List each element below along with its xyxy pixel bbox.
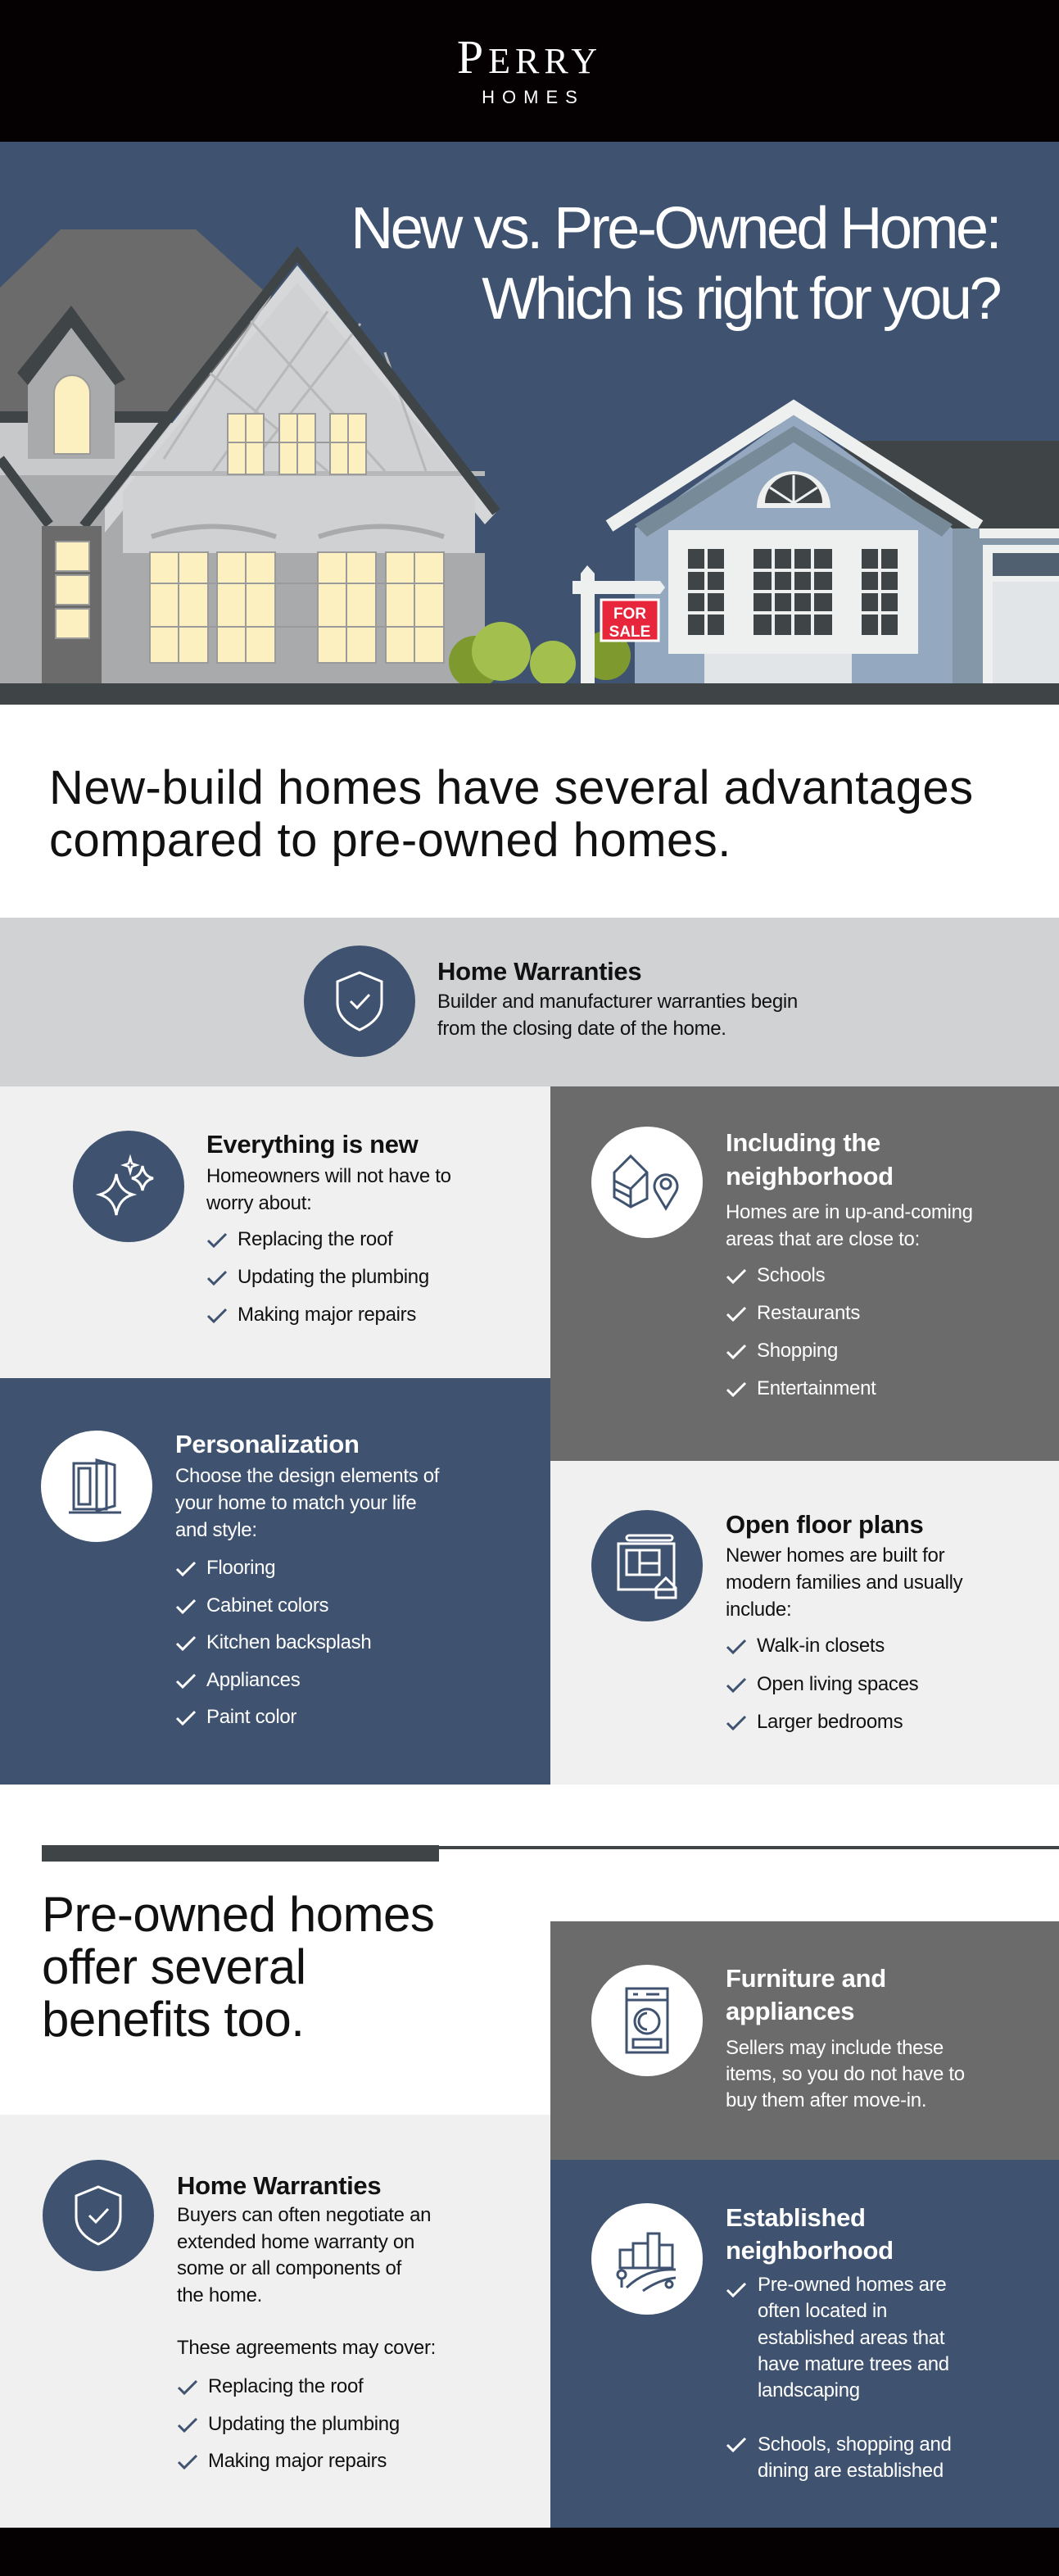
heading: Personalization [175,1430,360,1458]
text [726,2037,965,2111]
icon: washer [591,1965,703,2076]
bullet 1 [726,2274,949,2401]
logo: Perry Homes: PERRY [457,30,602,84]
list [207,1228,429,1326]
heading: Everything is new [206,1130,418,1159]
list: Replacing the roof [208,2375,363,2397]
icon: shield [304,946,415,1057]
list: Shopping [757,1340,838,1362]
bullet 2: dining are established [758,2460,944,2482]
heading: Open floor plans [726,1510,924,1539]
bullet 1: often located in [758,2300,887,2322]
heading [726,1128,894,1190]
text: include: [726,1599,791,1621]
panel: home warranties (pre-owned) [43,2160,436,2472]
text [206,1165,451,1214]
divider rule [42,1845,439,1862]
headline: pre-owned benefits: Pre-owned homes [42,1887,434,1942]
panel: furniture and appliances [591,1964,965,2111]
panel: everything is new [73,1130,451,1326]
panel: established neighborhood [591,2203,952,2482]
list [176,1557,371,1728]
headline: pre-owned benefits [42,1887,434,2047]
text [175,1465,439,1541]
text: Homes are in up-and-coming [726,1201,973,1223]
list [726,1264,876,1399]
heading: neighborhood [726,2236,894,2265]
list: Larger bedrooms [757,1711,903,1733]
bullet 1: established areas that [758,2327,944,2349]
heading: Including the [726,1128,880,1157]
footer bar [0,2528,1059,2576]
heading [726,1964,886,2025]
text: areas that are close to: [726,1228,920,1250]
heading [726,2203,894,2265]
list: Schools [757,1264,825,1286]
for sale sign: FOR [613,605,646,623]
headline: new-build advantages [49,761,974,867]
text: agreements: These agreements may cover: [177,2337,436,2359]
headline: pre-owned benefits: benefits too. [42,1992,304,2047]
for sale sign: SALE [609,624,650,641]
bullet 2 [726,2433,952,2482]
text: Newer homes are built for [726,1544,944,1567]
heading: home warranties: Home Warranties [437,957,641,986]
panel: open floor plans [591,1510,963,1733]
text: Sellers may include these [726,2037,944,2059]
hero title: Which is right for you? [482,266,999,332]
text: items, so you do not have to [726,2063,965,2085]
bullet 1: have mature trees and [758,2353,949,2375]
text [177,2204,431,2306]
heading: appliances [726,1997,854,2025]
bushes [449,622,631,688]
headline: new-build advantages: compared to pre-owned homes. [49,814,731,867]
text: extended home warranty on [177,2230,414,2253]
list: Entertainment [757,1377,876,1399]
icon: blueprint [591,1510,703,1621]
text: some or all components of [177,2257,401,2279]
heading: Home Warranties [177,2171,381,2200]
list: Restaurants [757,1302,860,1324]
panel: including the neighborhood [591,1127,973,1399]
hero title [351,196,1000,332]
heading: neighborhood [726,1162,894,1190]
list: Open living spaces [757,1673,918,1694]
panel backgrounds [0,918,1059,1086]
right house [609,407,1059,687]
text: your home to match your life [175,1492,416,1514]
bullet 2: Schools, shopping and [758,2433,952,2456]
heading: Furniture and [726,1964,886,1993]
list: Cabinet colors [206,1594,328,1616]
list: Making major repairs [208,2450,387,2472]
list: Paint color [206,1706,296,1728]
list: Flooring [206,1557,275,1579]
icon: house with pin [591,1127,703,1238]
list: Replacing the roof [238,1228,392,1250]
text: and style: [175,1519,257,1541]
panel: personalization [41,1430,439,1728]
text: buy them after move-in. [726,2089,926,2111]
text: worry about: [206,1192,311,1214]
logo: Perry Homes: HOMES [482,87,585,107]
list: Appliances [206,1668,300,1691]
text: warranty description: Builder and manufacturer warranties begin [437,991,798,1013]
panel backgrounds lower [550,1921,1059,2160]
header: logo bar [0,0,1059,142]
text: warranty description: from the closing date of the home. [437,1018,726,1040]
text [726,1201,973,1250]
hero illustration [0,142,1059,705]
list: Updating the plumbing [238,1266,429,1288]
headline: pre-owned benefits: offer several [42,1939,306,1994]
icon: town [591,2203,703,2315]
icon: doors [41,1431,152,1542]
list: Kitchen backsplash [206,1631,371,1653]
for sale sign [572,565,665,684]
text: Choose the design elements of [175,1465,439,1487]
list: Making major repairs [238,1304,416,1326]
list [178,2375,400,2472]
text: Buyers can often negotiate an [177,2204,431,2226]
logo: Perry Homes [457,30,602,107]
text [726,1544,963,1621]
icon: shield [43,2160,154,2271]
heading: Established [726,2203,866,2232]
list [726,1635,918,1733]
text: the home. [177,2284,262,2306]
text: warranty description [437,991,798,1040]
text: modern families and usually [726,1571,962,1594]
left house [0,229,496,690]
icon: sparkles [73,1131,184,1242]
text: Homeowners will not have to [206,1165,451,1187]
list: Walk-in closets [757,1635,885,1657]
headline: new-build advantages: New-build homes have several advantages [49,761,974,814]
panel: home warranties (new) [304,946,415,1057]
bullet 1: Pre-owned homes are [758,2274,946,2296]
list: Updating the plumbing [208,2412,400,2435]
bullet 1: landscaping [758,2379,860,2401]
hero title: New vs. Pre-Owned Home: [351,196,999,261]
